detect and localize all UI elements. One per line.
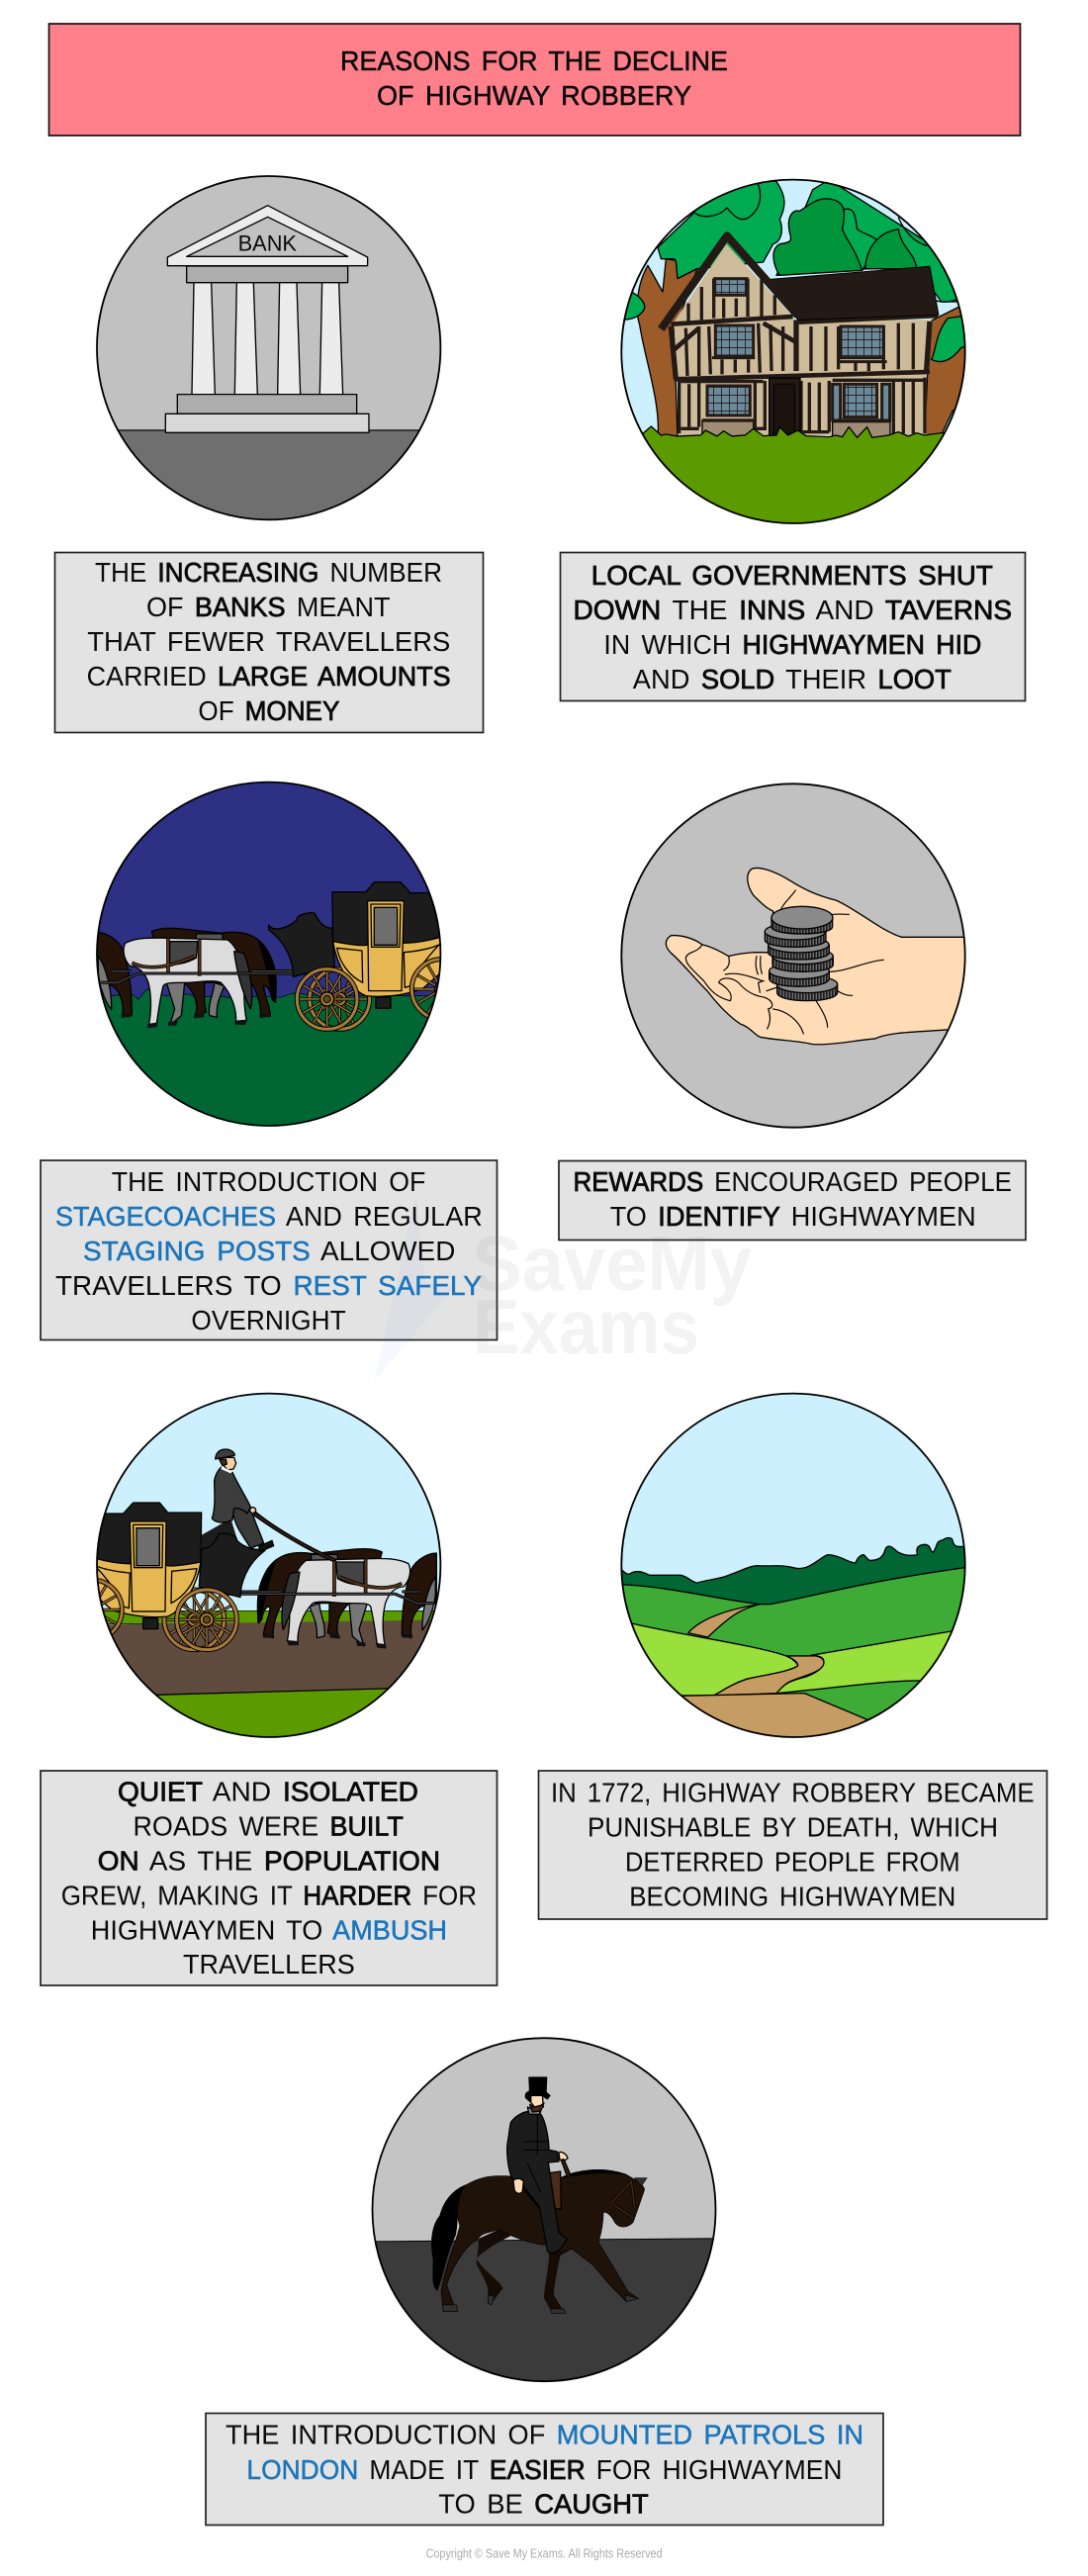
icon: bank: [97, 176, 439, 518]
text: banks: THAT FEWER TRAVELLERS: [87, 626, 450, 657]
text: stagecoaches: STAGING POSTS ALLOWED: [83, 1236, 455, 1266]
watermark: [374, 1192, 752, 1382]
text: rewards: TO IDENTIFY HIGHWAYMEN: [610, 1201, 976, 1232]
text: roads: TRAVELLERS: [183, 1949, 355, 1979]
text: banks: OF MONEY: [198, 695, 340, 726]
text: punishable by death: BECOMING HIGHWAYMEN: [629, 1881, 955, 1911]
icon: tudor inn: [622, 180, 964, 522]
text: stagecoaches: [41, 1160, 497, 1339]
text: banks: CARRIED LARGE AMOUNTS: [87, 661, 451, 691]
text: rewards: [559, 1161, 1026, 1241]
icon: hand holding coins: [622, 784, 964, 1127]
icon: mounted patrol rider: [373, 2039, 715, 2380]
text: roads: QUIET AND ISOLATED: [118, 1777, 418, 1807]
text: mounted patrols: [206, 2414, 883, 2525]
panel: inns and taverns: [560, 173, 1025, 700]
text: rewards: REWARDS ENCOURAGED PEOPLE: [574, 1166, 1012, 1197]
text: banks: OF BANKS MEANT: [146, 592, 390, 622]
text: stagecoaches: TRAVELLERS TO REST SAFELY: [55, 1270, 482, 1301]
text: roads: GREW, MAKING IT HARDER FOR: [61, 1880, 477, 1911]
panel: rewards: [559, 777, 1026, 1241]
text: stagecoaches: THE INTRODUCTION OF: [112, 1166, 425, 1197]
text: stagecoaches: OVERNIGHT: [191, 1305, 346, 1335]
panel: stagecoaches: [41, 772, 497, 1339]
text: roads: ROADS WERE BUILT: [133, 1810, 404, 1842]
panel: banks: [55, 168, 483, 732]
panel: mounted patrols: [206, 2028, 883, 2525]
panel: roads: [41, 1385, 497, 1985]
text: stagecoaches: STAGECOACHES AND REGULAR: [55, 1201, 483, 1232]
text: punishable by death: PUNISHABLE BY DEATH, WHICH: [588, 1811, 998, 1842]
text: inns and taverns: DOWN THE INNS AND TAVERNS: [574, 595, 1012, 625]
icon: stagecoach at night: [97, 783, 439, 1126]
title: OF HIGHWAY ROBBERY: [377, 80, 691, 111]
text: mounted patrols: THE INTRODUCTION OF MOUNTED PATROLS IN: [226, 2420, 863, 2450]
text: inns and taverns: LOCAL GOVERNMENTS SHUT: [591, 560, 993, 591]
text: punishable by death: [538, 1771, 1046, 1919]
text: roads: [41, 1771, 497, 1985]
text: mounted patrols: TO BE CAUGHT: [438, 2489, 649, 2520]
text: inns and taverns: IN WHICH HIGHWAYMEN HID: [603, 629, 981, 660]
text: banks: THE INCREASING NUMBER: [95, 557, 442, 588]
icon: countryside road: [622, 1395, 964, 1737]
title: [49, 24, 1021, 136]
icon: bank: BANK: [238, 231, 297, 256]
text: inns and taverns: [560, 552, 1025, 700]
watermark: Exams: [473, 1283, 699, 1370]
panel: punishable by death: [538, 1385, 1046, 1919]
title: REASONS FOR THE DECLINE: [340, 46, 728, 76]
text: punishable by death: IN 1772, HIGHWAY ROBBERY BECAME: [551, 1777, 1035, 1808]
text: roads: ON AS THE POPULATION: [98, 1846, 440, 1877]
text: punishable by death: DETERRED PEOPLE FROM: [625, 1846, 960, 1878]
text: inns and taverns: AND SOLD THEIR LOOT: [633, 664, 952, 694]
icon: coach driver: [212, 1449, 336, 1561]
text: mounted patrols: LONDON MADE IT EASIER FOR HIGHWAYMEN: [246, 2454, 842, 2485]
icon: stagecoach on road with driver: [97, 1395, 439, 1737]
text: banks: [55, 552, 483, 732]
copyright: Copyright © Save My Exams. All Rights Reserved: [426, 2546, 663, 2560]
watermark: SaveMy: [472, 1220, 752, 1307]
text: roads: HIGHWAYMEN TO AMBUSH: [91, 1914, 447, 1945]
